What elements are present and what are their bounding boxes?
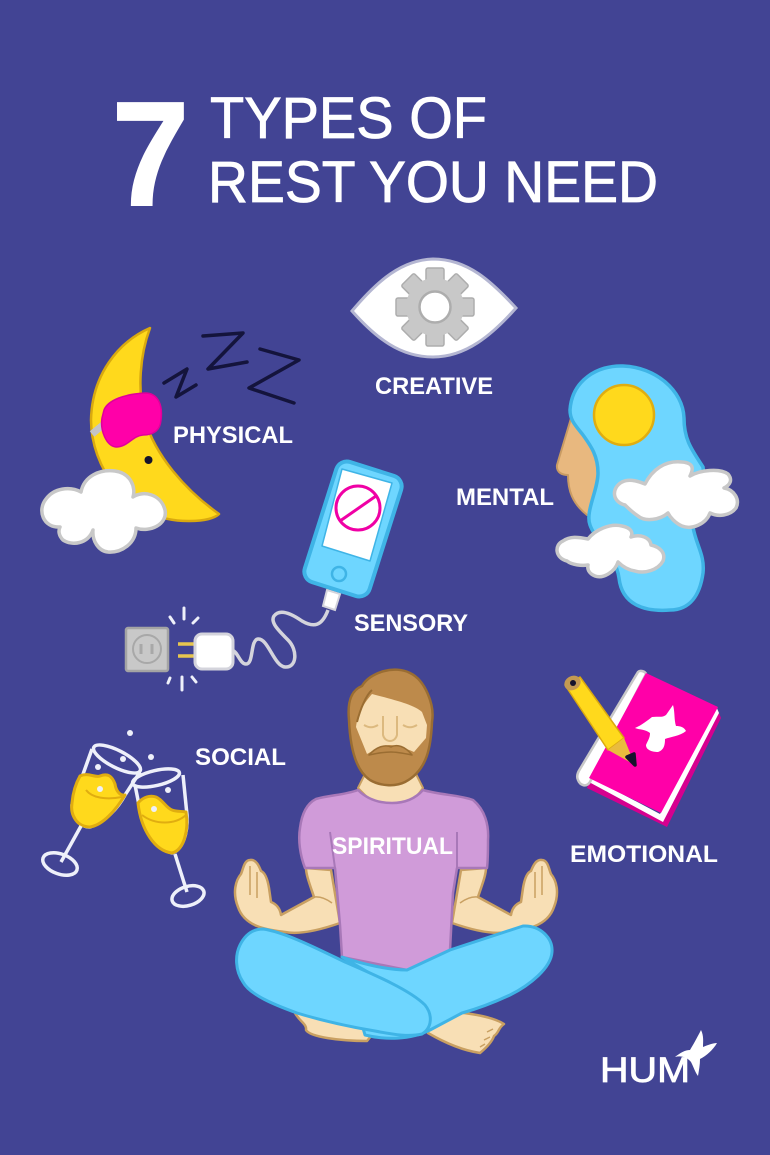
cloud <box>42 471 165 552</box>
phone body <box>302 459 404 599</box>
icon: champagne glasses (social) <box>40 730 207 910</box>
label: creative: CREATIVE <box>375 373 493 400</box>
shirt <box>299 790 488 970</box>
sleep mask strap <box>92 425 103 434</box>
title line two: REST YOU NEED <box>208 150 658 215</box>
prohibited sign <box>336 486 380 530</box>
back cover <box>587 708 721 827</box>
cover <box>589 673 718 813</box>
wall socket <box>126 628 168 671</box>
hair and beard <box>349 670 433 785</box>
icon: journal and pencil (emotional) <box>562 671 721 827</box>
label: spiritual: SPIRITUAL <box>332 833 453 860</box>
phone screen <box>322 469 392 561</box>
spine <box>577 671 646 785</box>
logo text: HUM <box>600 1051 690 1090</box>
left leg <box>237 929 430 1035</box>
neck <box>358 770 423 805</box>
face <box>356 694 427 754</box>
right arm and hand <box>452 860 557 933</box>
lower cloud <box>557 525 664 577</box>
snore letters zzz <box>164 333 299 403</box>
right leg <box>342 926 552 1038</box>
phone connector <box>323 590 340 610</box>
title <box>112 72 658 237</box>
head <box>349 670 433 785</box>
bubbles <box>95 730 171 812</box>
home button <box>332 567 346 581</box>
title line one: TYPES OF <box>210 86 487 151</box>
icon: meditating man (spiritual) <box>235 670 557 1053</box>
hair <box>570 366 703 610</box>
title numeral: 7 <box>112 72 189 237</box>
icon: sleeping moon (physical) <box>42 328 299 552</box>
sun <box>594 385 654 445</box>
logo bird <box>675 1030 717 1076</box>
icon: unplugged phone (sensory) <box>126 459 404 690</box>
label: mental: MENTAL <box>456 484 554 511</box>
bird emblem <box>635 705 686 752</box>
label: sensory: SENSORY <box>354 610 468 637</box>
eyes and nose <box>364 716 417 741</box>
right glass <box>131 765 207 910</box>
moon <box>91 328 219 521</box>
moon eye <box>144 456 152 464</box>
icon: eye with gear (creative) <box>352 259 516 357</box>
feet <box>295 1010 504 1053</box>
sleep mask <box>102 393 161 447</box>
left arm and hand <box>235 860 340 933</box>
label: social: SOCIAL <box>195 744 286 771</box>
plug <box>195 634 233 669</box>
pencil <box>562 673 635 765</box>
upper cloud <box>614 462 737 527</box>
moustache <box>369 746 412 755</box>
icon: head with sun and clouds (mental) <box>557 366 737 610</box>
label: physical: PHYSICAL <box>173 422 293 449</box>
label: emotional: EMOTIONAL <box>570 841 718 868</box>
sparks <box>168 608 198 690</box>
cable <box>232 610 328 667</box>
logo: HUM <box>600 1030 717 1090</box>
left glass <box>40 740 144 880</box>
face <box>557 415 604 515</box>
pages <box>588 706 719 822</box>
plug prongs <box>178 644 194 656</box>
sleeve folds <box>330 832 457 868</box>
hair curl <box>357 690 372 722</box>
